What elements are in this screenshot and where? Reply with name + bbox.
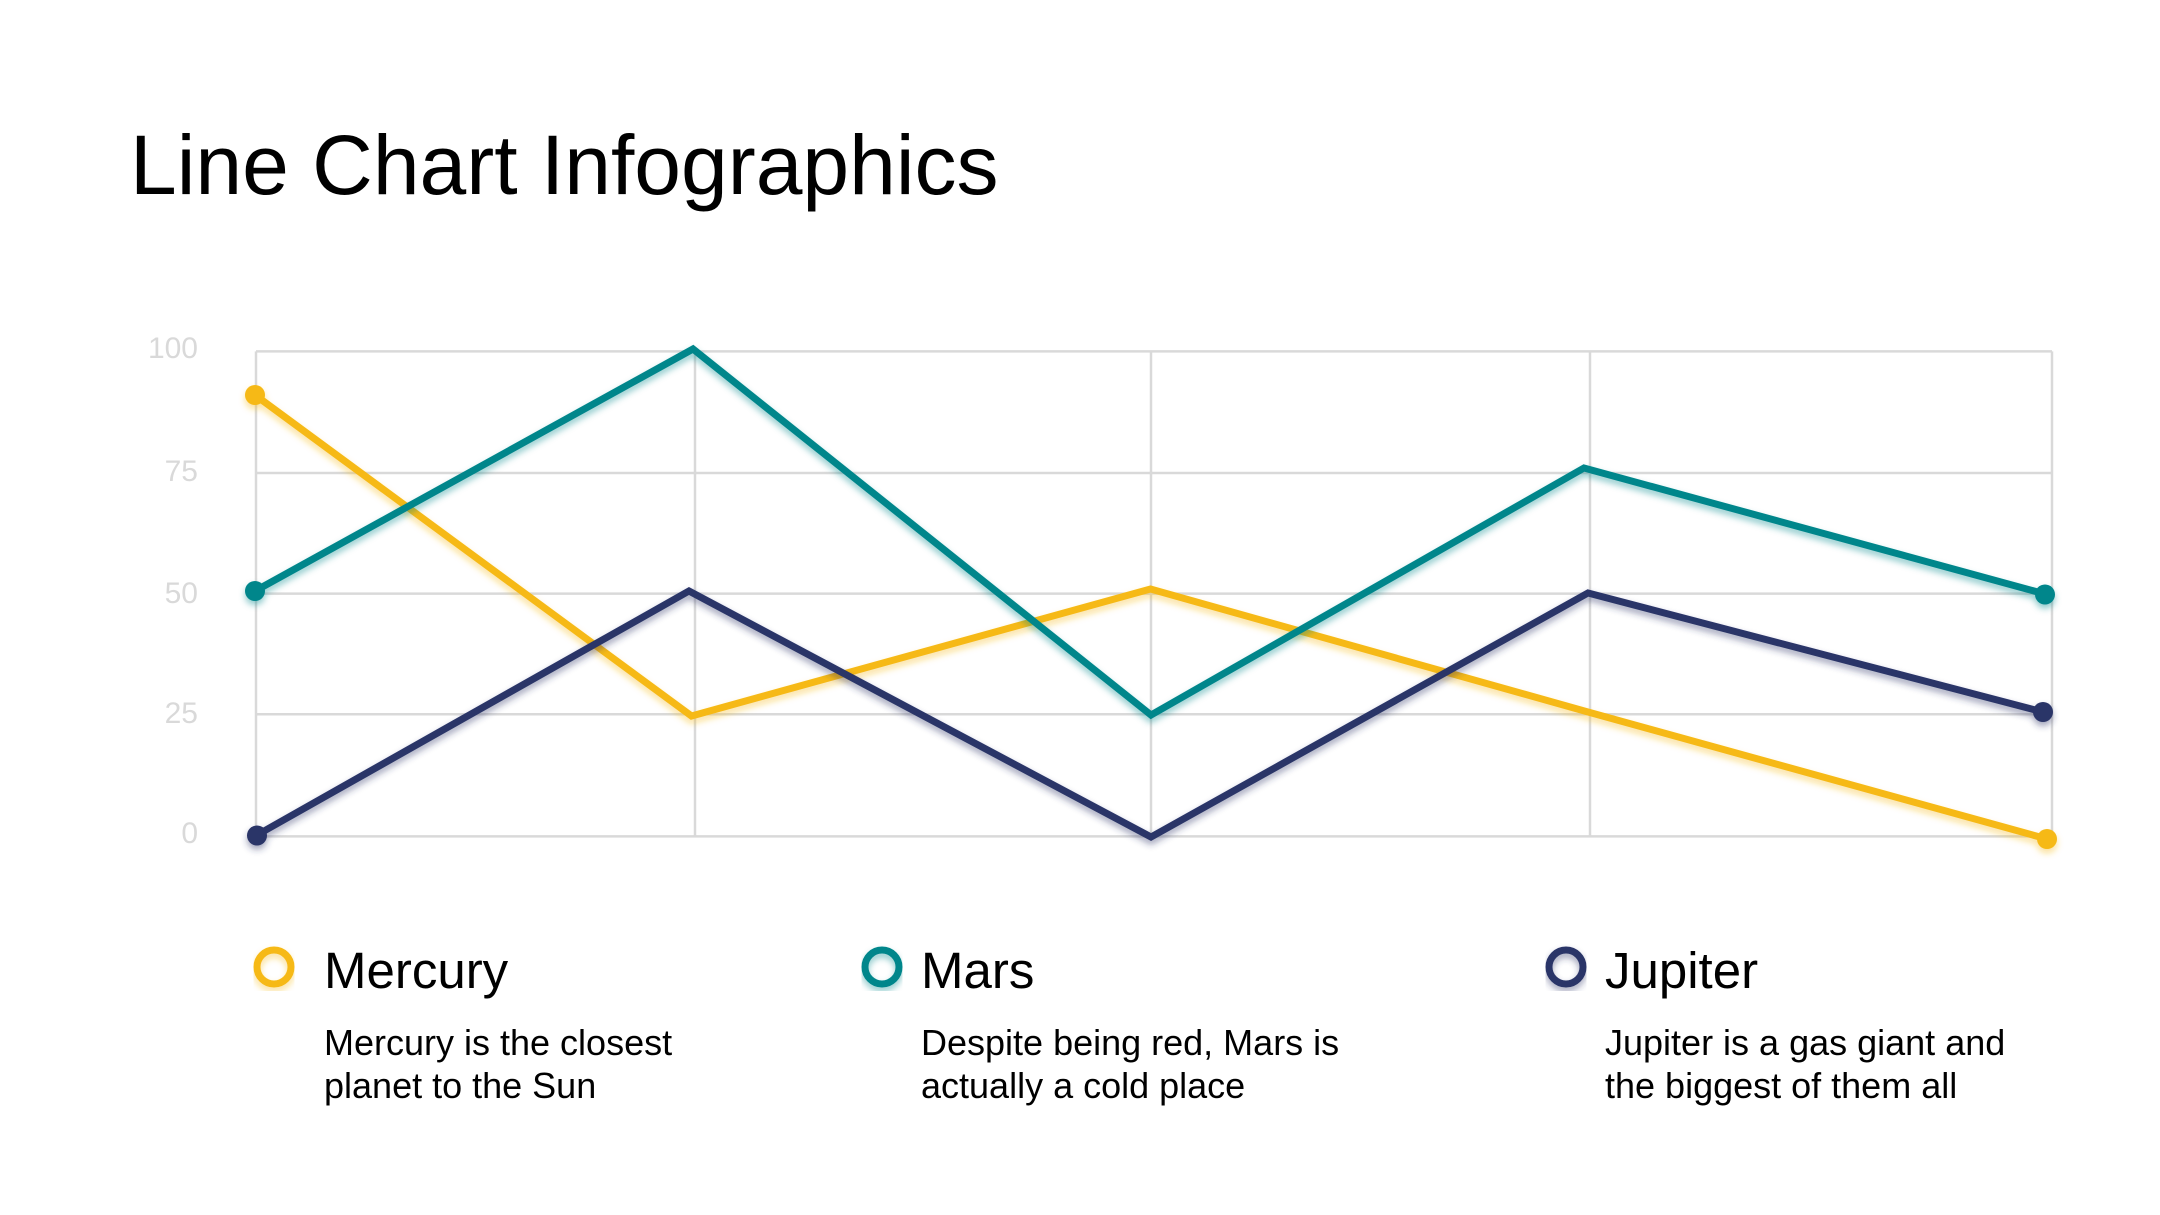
line chart (148, 332, 2057, 850)
chart gridlines (256, 351, 2052, 836)
y-axis labels: 100 (148, 332, 198, 365)
Mars heading: Mars (921, 942, 1034, 999)
y-axis labels: 0 (181, 817, 198, 850)
series: Jupiter (247, 591, 2053, 846)
y-axis labels: 50 (165, 577, 198, 610)
Mars description: actually a cold place (921, 1065, 1245, 1106)
title: Line Chart Infographics (130, 118, 999, 212)
icon: Jupiter ring (1549, 950, 1583, 984)
legend: Mars (865, 942, 1339, 1106)
y-axis labels (148, 332, 198, 850)
Jupiter description: the biggest of them all (1605, 1065, 1957, 1106)
y-axis labels: 25 (165, 697, 198, 730)
series: Mercury (245, 385, 2057, 849)
Mercury heading: Mercury (324, 942, 509, 999)
Jupiter heading: Jupiter (1605, 942, 1758, 999)
Mars description: Despite being red, Mars is (921, 1022, 1339, 1063)
legend: Jupiter (1549, 942, 2005, 1106)
Jupiter description: Jupiter is a gas giant and (1605, 1022, 2005, 1063)
series: Mars (245, 349, 2055, 715)
y-axis labels: 75 (165, 455, 198, 488)
legend: Mercury (257, 942, 672, 1106)
icon: Mercury ring (257, 950, 291, 984)
icon: Mars ring (865, 950, 899, 984)
Mercury description: planet to the Sun (324, 1065, 596, 1106)
Mercury description: Mercury is the closest (324, 1022, 672, 1063)
